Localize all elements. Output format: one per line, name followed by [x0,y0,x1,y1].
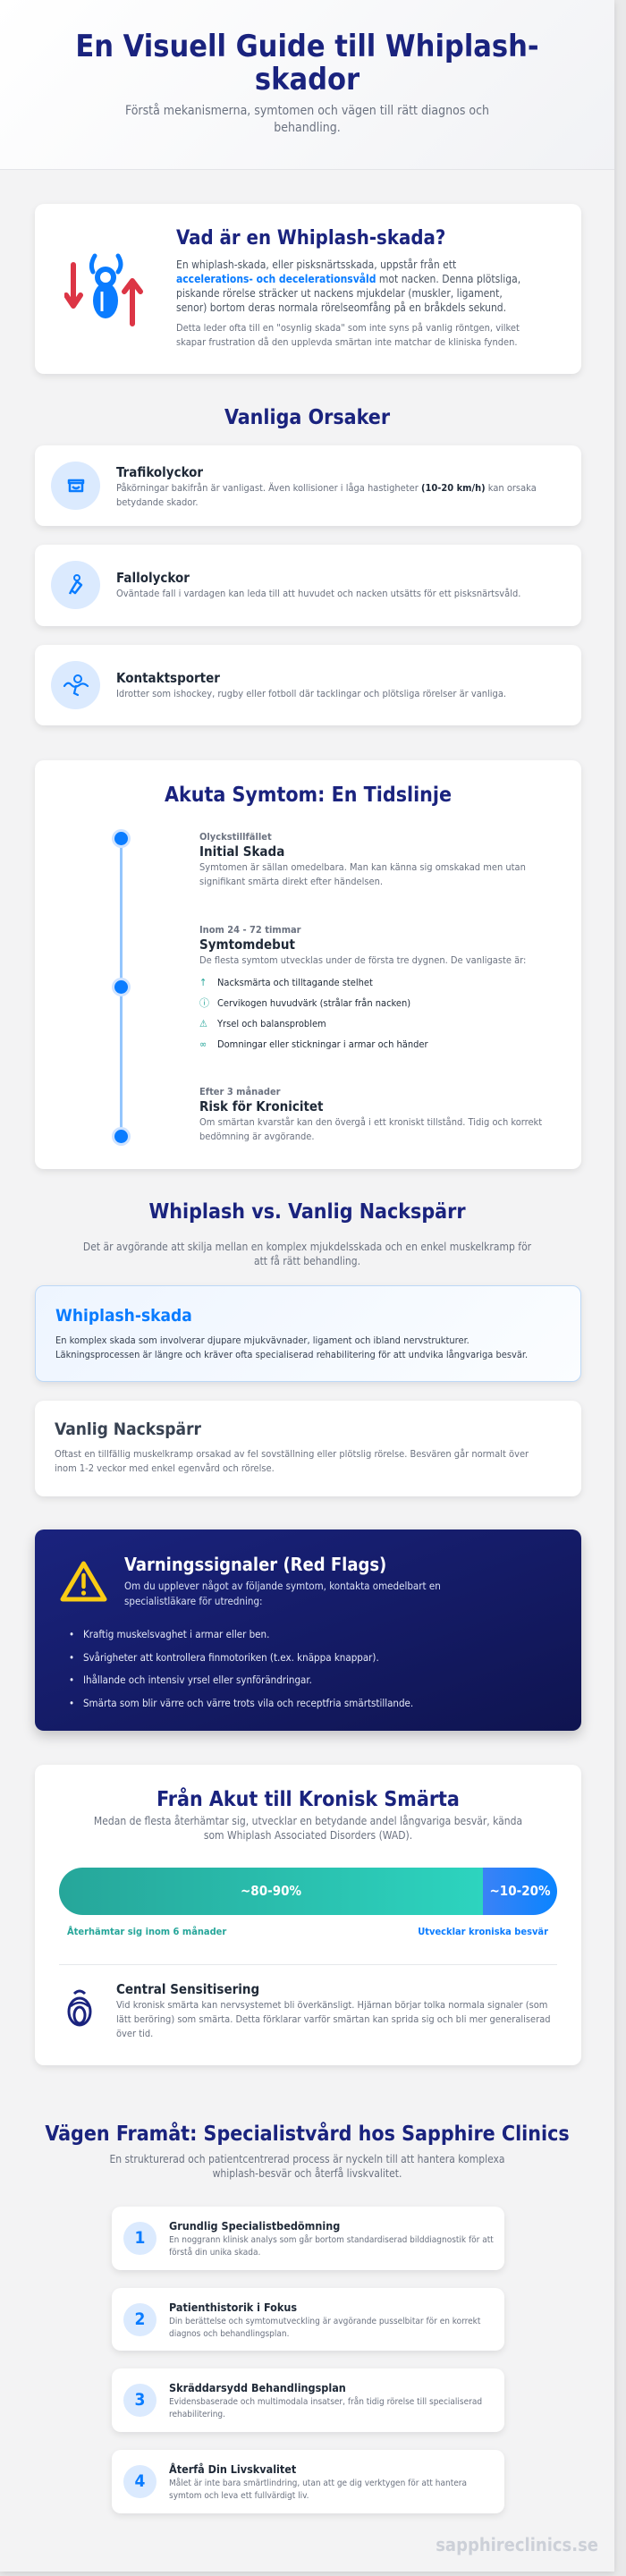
symptom list: ⓘ [199,997,209,1009]
step 3 [112,2368,504,2432]
item 2: Inom 24 - 72 timmar [199,924,301,936]
icon: car [51,462,100,510]
heading: Vad är en Whiplash-skada? [176,227,445,250]
panel: timeline [35,760,581,1169]
text: Återfå Din Livskvalitet [169,2462,296,2476]
text: central sensitisation: Vid kronisk smärta kan nervsystemet bli överkänsligt. Hjärnan börjar tolka normala signaler (som lätt beröring) som smärta. Detta förklarar varför smärtan kan sprida sig och bli mer generaliserad över tid. [116,1999,551,2039]
dot 2 [114,980,128,994]
text: En komplex skada som involverar djupare mjukvävnader, ligament och ibland nervstrukturer. Läkningsprocessen är längre och kräver ofta specialiserad rehabilitering för att undvika långvariga besvär. [55,1335,528,1360]
text: Kontaktsporter [116,670,220,686]
text: central sensitisation [116,1981,551,2039]
item 1: Initial Skada [199,843,284,860]
list: • Kraftig muskelsvaghet i armar eller ben. [69,1628,269,1640]
symptom list: ↑ [199,977,207,988]
number [123,2222,156,2255]
text: Skräddarsydd Behandlingsplan [169,2381,346,2394]
number: 3 [135,2390,145,2410]
item 3 [199,1086,542,1142]
number: 1 [135,2228,145,2248]
text: Påkörningar bakifrån är vanligast. Även kollisioner i låga hastigheter (10-20 km/h) kan orsaka betydande skador. [116,482,537,508]
item 3: Risk för Kronicitet [199,1098,324,1114]
icon: whiplash motion [64,254,143,326]
bar labels: Återhämtar sig inom 6 månader [67,1926,226,1937]
item 2 [199,924,526,1050]
item 3: Efter 3 månader [199,1086,281,1097]
symptom list: Cervikogen huvudvärk (strålar från nacken) [217,997,410,1009]
bar chart: ~80-90% [241,1883,301,1899]
step 4 [112,2450,504,2513]
bar chart [59,1868,557,1915]
text: Målet är inte bara smärtlindring, utan att ge dig verktygen för att hantera symtom och leva ett fullvärdigt liv. [169,2479,467,2501]
heading: causes: Vanliga Orsaker [224,406,390,429]
item 2: Symtomdebut [199,936,295,953]
subtitle: Förstå mekanismerna, symtomen och vägen till rätt diagnos och behandling. [125,104,489,135]
dot 1 [114,832,128,845]
item 3: Om smärtan kvarstår kan den övergå i ett kroniskt tillstånd. Tidig och korrekt bedömning är avgörande. [199,1116,542,1142]
text: Grundlig Specialistbedömning [169,2219,340,2233]
panel: red flags [35,1530,581,1731]
heading: way forward: Vägen Framåt: Specialistvård hos Sapphire Clinics [45,2123,570,2146]
title: Vanlig Nackspärr [55,1419,201,1439]
title: Varningssignaler (Red Flags) [124,1554,386,1575]
number [123,2465,156,2498]
symptom list [199,977,428,1050]
number: 2 [135,2309,145,2329]
text [116,670,506,699]
intro: Om du upplever något av följande symtom, kontakta omedelbart en specialistläkare för utredning: [124,1580,441,1607]
text: En whiplash-skada, eller pisksnärtsskada, uppstår från ett accelerations- och decelerationsvåld mot nacken. Denna plötsliga, piskande rörelse sträcker ut nackens mjukdelar (muskler, ligament, senor) bortom deras normala rörelseomfång på en bråkdels sekund. [176,258,520,314]
panel: what is whiplash [35,204,581,374]
panel: neck strain card [35,1401,581,1496]
text [169,2381,482,2419]
title: Whiplash-skada [55,1306,192,1326]
text: central sensitisation: Central Sensitisering [116,1981,259,1997]
panel: whiplash card [35,1285,581,1382]
footer: website: sapphireclinics.se [436,2534,598,2555]
bar labels: Utvecklar kroniska besvär [418,1926,548,1937]
bar labels [67,1926,548,1937]
panel: cause falls [35,545,581,626]
subtitle: Medan de flesta återhämtar sig, utvecklar en betydande andel långvariga besvär, kända som Whiplash Associated Disorders (WAD). [94,1815,522,1842]
text: Evidensbaserade och multimodala insatser, från tidig rörelse till specialiserad rehabilitering. [169,2397,482,2419]
panel: chronic pain [35,1765,581,2065]
list: • Ihållande och intensiv yrsel eller synförändringar. [69,1674,312,1686]
text: Fallolyckor [116,570,190,586]
list [69,1628,413,1708]
symptom list: Nacksmärta och tilltagande stelhet [217,977,373,988]
icon: central sensitisation [68,1989,91,2027]
text: Trafikolyckor [116,464,203,480]
step 1 [112,2207,504,2270]
text: En noggrann klinisk analys som går bortom standardiserad bilddiagnostik för att förstå din unika skada. [169,2235,494,2258]
bar chart: ~10-20% [490,1883,551,1899]
text: Oftast en tillfällig muskelkramp orsakad av fel sovställning eller plötslig rörelse. Besvären går normalt över inom 1-2 veckor med enkel egenvård och rörelse. [55,1448,529,1474]
number [123,2303,156,2336]
item 1: Symtomen är sällan omedelbara. Man kan känna sig omskakad men utan signifikant smärta direkt efter händelsen. [199,861,526,887]
heading: Från Akut till Kronisk Smärta [156,1788,460,1811]
item 1: Olyckstillfället [199,831,272,843]
symptom list: ⚠ [199,1018,207,1030]
item 1 [199,831,526,887]
timeline line [120,838,123,1137]
step 2 [112,2288,504,2351]
icon: athlete [51,661,100,709]
text: small: Detta leder ofta till en "osynlig skada" som inte syns på vanlig röntgen, vilket skapar frustration då den upplevda smärtan inte matchar de kliniska fynden. [176,322,520,348]
text [169,2219,494,2258]
subtitle: way forward: En strukturerad och patientcentrerad process är nyckeln till att hantera komplexa whiplash-besvär och återfå livskvalitet. [109,2153,505,2180]
list: • Smärta som blir värre och värre trots vila och receptfria smärtstillande. [69,1696,413,1708]
number [123,2384,156,2417]
panel: cause traffic [35,445,581,526]
text [116,570,520,599]
header [0,0,614,170]
heading: comparison: Whiplash vs. Vanlig Nackspärr [148,1200,466,1224]
title: En Visuell Guide till Whiplash-skador [75,29,539,97]
text: Patienthistorik i Fokus [169,2301,297,2314]
subtitle: comparison: Det är avgörande att skilja mellan en komplex mjukdelsskada och en enkel muskelkramp för att få rätt behandling. [83,1241,531,1267]
dot 3 [114,1130,128,1143]
text: Idrotter som ishockey, rugby eller fotboll där tacklingar och plötsliga rörelser är vanliga. [116,688,506,699]
panel: cause sports [35,645,581,725]
icon: warning [61,1562,107,1601]
symptom list: Domningar eller stickningar i armar och händer [217,1038,428,1050]
number: 4 [135,2471,145,2491]
text [169,2462,467,2501]
text [169,2301,481,2339]
symptom list: ∞ [199,1038,207,1050]
text: Din berättelse och symtomutveckling är avgörande pusselbitar för en korrekt diagnos och behandlingsplan. [169,2317,480,2339]
heading: Akuta Symtom: En Tidslinje [165,784,452,807]
icon: falling person [51,561,100,609]
text [116,464,537,508]
text: Oväntade fall i vardagen kan leda till att huvudet och nacken utsätts för ett pisksnärtsvåld. [116,588,520,599]
divider [59,1964,557,1965]
list: • Svårigheter att kontrollera finmotoriken (t.ex. knäppa knappar). [69,1651,379,1664]
item 2: De flesta symtom utvecklas under de första tre dygnen. De vanligaste är: [199,954,526,966]
symptom list: Yrsel och balansproblem [217,1018,326,1030]
